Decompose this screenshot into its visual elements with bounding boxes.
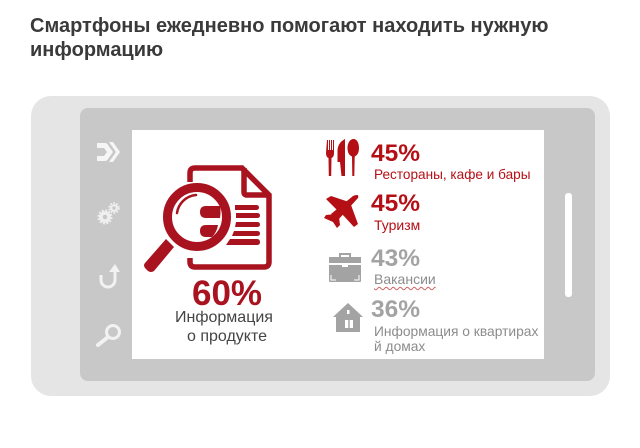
value: 43%: 43% (371, 245, 420, 272)
stat: apartments and houses (371, 296, 538, 354)
label: apartments and houses: й домах (374, 339, 425, 354)
icon: document with magnifier (144, 165, 272, 272)
label: apartments and houses (374, 324, 538, 354)
title: Смартфоны ежедневно помогают находить нужную информацию (30, 15, 548, 61)
label: product information: Информация (175, 309, 273, 326)
label: apartments and houses: Информация о квартирах (374, 324, 538, 339)
panel: phone body (31, 96, 610, 396)
icon: forward arrows (97, 142, 120, 162)
icon: briefcase (329, 253, 361, 282)
stat: tourism (371, 190, 420, 233)
icon: airplane (324, 195, 358, 228)
value: 45% tourism: 45% (371, 190, 420, 217)
stat: vacancies (371, 245, 436, 290)
label: vacancies: Вакансии (374, 271, 436, 287)
label: product information (175, 309, 273, 345)
icon: gears (98, 202, 120, 224)
panel: phone inner frame (80, 108, 595, 381)
stat: 60% product information (175, 274, 273, 345)
label: restaurants: Рестораны, кафе и бары (374, 167, 530, 182)
icon: house (333, 303, 363, 332)
label: product information: о продукте (187, 328, 267, 345)
label: tourism: Туризм (374, 217, 420, 233)
icon: return arrow (100, 264, 120, 288)
value: 60%: 60% (192, 274, 262, 313)
value: 36%: 36% (371, 296, 420, 323)
value: 45% restaurants: 45% (371, 140, 420, 167)
icon: small magnifier (96, 324, 121, 347)
stat: restaurants (371, 140, 530, 182)
phone side button (565, 193, 572, 297)
icon: cutlery (326, 139, 359, 176)
panel: phone screen (132, 130, 544, 359)
